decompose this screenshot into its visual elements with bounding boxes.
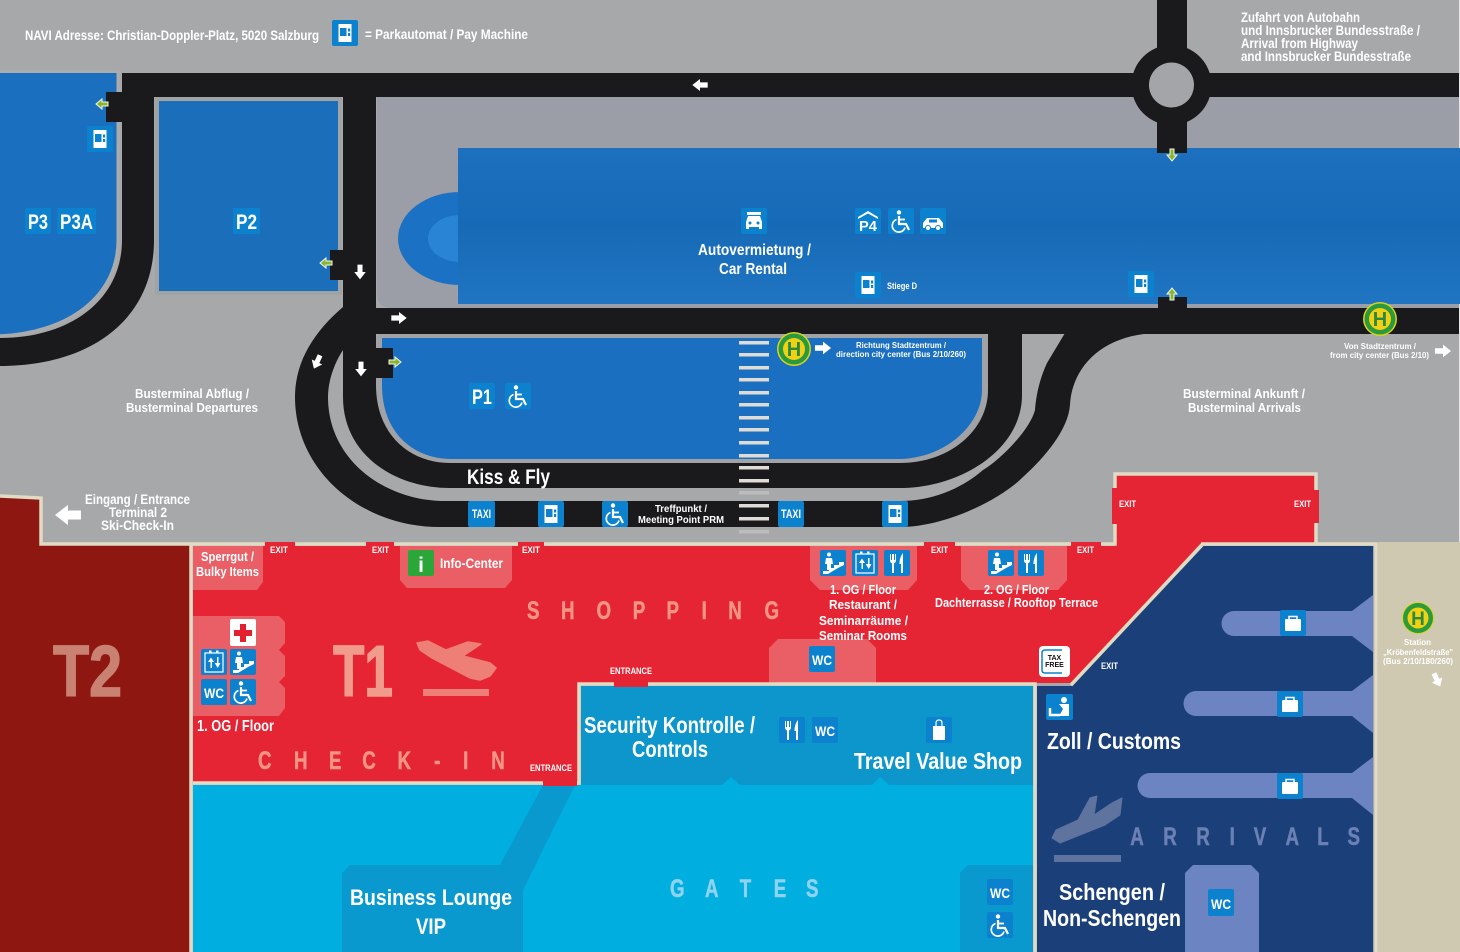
road: stubs	[106, 92, 1187, 378]
bus stop text: direction city center	[836, 340, 966, 359]
bus station label	[1383, 637, 1453, 666]
restaurant and seminar label	[819, 582, 908, 643]
terminal 1 red hall	[193, 474, 1315, 783]
roads	[0, 0, 1459, 527]
meeting point label: Treffpunkt /	[655, 503, 707, 515]
parking P1 lot	[382, 338, 982, 459]
T2 label: T2	[53, 632, 122, 712]
bus stop text: direction city center: direction city center (Bus 2/10/260)	[836, 349, 966, 359]
entrance labels: ENTRANCE	[610, 666, 652, 676]
bulky items label: Bulky Items	[196, 564, 259, 579]
icon: restaurant security	[779, 717, 805, 743]
bus terminal departures label: Busterminal Departures	[126, 400, 258, 415]
exit labels: EXIT	[1101, 661, 1118, 671]
exit labels: EXIT	[372, 545, 389, 555]
badge: WC gates: WC	[990, 885, 1010, 901]
customs label: Zoll / Customs	[1047, 728, 1181, 754]
icon: wheelchair gates	[987, 912, 1013, 938]
highway access text: and Innsbrucker Bundesstraße	[1241, 48, 1411, 64]
bus station label: „Kröbenfeldstraße"	[1383, 648, 1453, 657]
terminal 2 entrance label: Eingang / Entrance	[85, 491, 190, 507]
road: Kiss and Fly inner loop	[343, 97, 1022, 488]
badge: WC security	[812, 717, 838, 743]
icon: baggage belt 2	[1277, 691, 1303, 717]
check-in label: CHECK-IN	[258, 746, 505, 775]
icon: car rental	[741, 208, 767, 234]
bus stop text: direction city center: Richtung Stadtzentrum /	[856, 340, 947, 350]
belt 1	[1222, 595, 1373, 652]
exit labels: EXIT	[1119, 499, 1136, 509]
icon: pay machine road east	[882, 501, 908, 527]
room: toilets	[769, 639, 876, 683]
icon: tax free: TAX	[1048, 655, 1062, 662]
bus stop text: from city center: from city center (Bus 2/10)	[1330, 350, 1429, 360]
badge: WC arrivals	[1208, 889, 1234, 916]
icon: pay machine legend	[332, 20, 358, 46]
icon: pay machine road west	[538, 501, 564, 527]
badge: taxi west: TAXI	[472, 509, 491, 521]
icon: wheelchair meeting point	[602, 501, 628, 527]
exit labels: EXIT	[1077, 545, 1094, 555]
exit labels: EXIT	[1294, 499, 1311, 509]
room: restaurant stairs	[810, 546, 917, 590]
icon: P4 badge	[855, 208, 881, 235]
meeting point label	[638, 503, 724, 526]
schengen label: Non-Schengen	[1043, 905, 1181, 931]
parking P4 semi-circular ramp	[398, 192, 522, 285]
icon: tax free: FREE	[1045, 662, 1064, 669]
rooftop terrace label: Dachterrasse / Rooftop Terrace	[935, 595, 1098, 610]
header address text: = Parkautomat / Pay Machine	[365, 26, 528, 42]
business lounge label	[350, 885, 512, 939]
badge: taxi east: TAXI	[781, 509, 801, 521]
rooftop terrace label: 2. OG / Floor	[984, 582, 1049, 597]
bus stop: city center direction	[777, 332, 811, 366]
icon: pay machine P3	[87, 126, 113, 152]
bus stop: from city center: H	[1373, 309, 1387, 331]
bus stop: from city center	[1363, 302, 1397, 336]
badge: WC west: WC	[204, 685, 224, 701]
beige right strip	[1378, 542, 1460, 952]
highway access text: und Innsbrucker Bundesstraße /	[1241, 22, 1420, 38]
arrivals label: ARRIVALS	[1130, 822, 1360, 851]
right edge line	[1459, 0, 1460, 542]
icon: pay machine P4 east	[1128, 271, 1154, 297]
bus stop: city center direction: H	[787, 339, 801, 361]
icon: baggage belt 3	[1277, 773, 1303, 799]
entrance labels	[530, 666, 652, 773]
zone: business lounge	[342, 785, 575, 952]
badge: WC gates	[987, 879, 1013, 905]
entrance labels: ENTRANCE	[530, 763, 572, 773]
room: first floor services	[193, 616, 285, 716]
icon: customs	[1046, 694, 1073, 720]
shopping label: SHOPPING	[527, 596, 779, 625]
icon: restaurant first floor	[884, 550, 910, 576]
schengen label	[1043, 879, 1181, 931]
icon: arriving plane	[1052, 796, 1122, 862]
parking P2 lot	[157, 99, 340, 293]
security label: Security Kontrolle /	[584, 712, 755, 738]
badge: taxi west	[468, 501, 495, 527]
icon: car P4	[920, 208, 946, 234]
car rental label: Car Rental	[719, 261, 787, 278]
parking P3 / P3A lot	[0, 72, 118, 336]
car rental label: Autovermietung /	[698, 242, 811, 259]
badge: P3: P3	[28, 211, 48, 234]
badge: WC security: WC	[815, 723, 835, 739]
icon: lift west	[201, 649, 227, 675]
bus terminal departures label: Busterminal Abflug /	[135, 386, 249, 401]
road: highway access	[1157, 0, 1187, 153]
terminal 2 block	[0, 497, 190, 952]
arrivals toilet room	[1185, 865, 1259, 952]
icon: first aid	[230, 619, 256, 646]
bus terminal departures label	[126, 386, 258, 415]
bus stop text: from city center: Von Stadtzentrum /	[1344, 341, 1417, 351]
Stiege D label: Stiege D	[887, 281, 917, 291]
gates label: GATES	[670, 874, 819, 903]
bus stop text: from city center	[1330, 341, 1429, 360]
highway access text	[1241, 9, 1420, 64]
arrivals hall	[1037, 546, 1373, 952]
icon: shopping bag	[926, 717, 952, 743]
terminal 2 entrance label: Ski-Check-In	[101, 517, 174, 533]
parking P4 lot	[458, 148, 1460, 304]
security hall	[581, 686, 1033, 785]
bus station label: Station	[1404, 637, 1431, 647]
road: horizontal lower road	[343, 308, 1459, 334]
business lounge label: Business Lounge	[350, 885, 512, 910]
icon: departing plane	[417, 641, 496, 696]
restaurant and seminar label: 1. OG / Floor	[830, 582, 896, 597]
bus terminal arrivals label: Busterminal Arrivals	[1188, 400, 1301, 415]
exit labels	[270, 499, 1311, 671]
belt 3	[1138, 757, 1373, 815]
info center label: Info-Center	[440, 556, 504, 571]
badge: WC arrivals: WC	[1211, 896, 1231, 912]
bus station label: (Bus 2/10/180/260)	[1383, 657, 1453, 666]
travel value shop label: Travel Value Shop	[854, 748, 1022, 774]
Kiss and Fly label: Kiss & Fly	[467, 466, 550, 489]
bulky items label	[196, 549, 259, 579]
roundabout	[1132, 45, 1212, 125]
icon: stairs second floor	[988, 550, 1014, 576]
bus stop: Kröbenfeldstraße	[1402, 602, 1434, 634]
exit labels: EXIT	[270, 545, 288, 555]
gates darker zones	[342, 777, 1033, 952]
restaurant and seminar label: Restaurant /	[829, 597, 897, 612]
bulky items label: Sperrgut /	[201, 549, 254, 564]
header address text	[25, 20, 528, 46]
restaurant and seminar label: Seminar Rooms	[819, 628, 907, 643]
icon: info badge: i	[418, 554, 424, 577]
business lounge label: VIP	[416, 914, 446, 939]
zone: gates services	[960, 865, 1033, 952]
badge: WC west	[201, 679, 227, 705]
badge: P2: P2	[236, 211, 257, 234]
schengen label: Schengen /	[1059, 879, 1166, 905]
road: left curve	[0, 73, 154, 366]
icon: lift first floor	[852, 550, 878, 576]
baggage belts	[1138, 595, 1373, 952]
belt 2	[1184, 675, 1373, 733]
icon: wheelchair west	[230, 679, 256, 705]
road: top main road	[122, 73, 1459, 97]
building walls	[0, 474, 1376, 952]
icon: info badge	[408, 550, 434, 577]
exit labels: EXIT	[522, 545, 540, 555]
bus terminal arrivals label: Busterminal Ankunft /	[1183, 386, 1305, 401]
badge: P1: P1	[472, 386, 492, 409]
T1 label: T1	[333, 632, 393, 712]
car rental label	[698, 242, 811, 278]
bus stop: Kröbenfeldstraße: H	[1411, 609, 1425, 630]
badge: P3A: P3A	[60, 211, 93, 234]
first floor label: 1. OG / Floor	[197, 718, 274, 735]
meeting point label: Meeting Point PRM	[638, 514, 724, 526]
direction arrows	[55, 79, 1451, 689]
badge: WC shopping: WC	[812, 652, 832, 668]
inner apron band	[377, 97, 1459, 308]
security label	[584, 712, 755, 762]
security label: Controls	[632, 736, 708, 762]
icon: wheelchair P1	[505, 383, 531, 409]
bus terminal arrivals label	[1183, 386, 1305, 415]
terminal 2 entrance label	[85, 491, 190, 533]
rooftop terrace label	[935, 582, 1098, 610]
exit labels: EXIT	[931, 545, 948, 555]
room: info center	[400, 546, 512, 588]
highway access text: Zufahrt von Autobahn	[1241, 9, 1360, 25]
icon: baggage belt 1	[1280, 610, 1306, 636]
badge: taxi east	[778, 501, 804, 527]
icon: stairs first floor	[820, 550, 846, 576]
light rooms on red hall	[193, 546, 1067, 716]
restaurant and seminar label: Seminarräume /	[819, 613, 908, 628]
zone: gate ticks	[722, 777, 889, 785]
room: bulky items	[193, 546, 263, 590]
terminal 2 entrance label: Terminal 2	[109, 504, 167, 520]
parking P1 border	[376, 333, 988, 463]
pedestrian crossing	[739, 341, 769, 534]
road: outer loop	[295, 307, 1160, 527]
red exit and entrance gaps	[265, 488, 1319, 786]
icon: P4 badge: P4	[859, 218, 878, 235]
icon: pay machine Stiege D	[855, 272, 881, 298]
icon: wheelchair P4	[888, 208, 914, 234]
header address text: NAVI Adresse: Christian-Doppler-Platz, 5020 Salzburg	[25, 27, 319, 43]
icon: stairs west	[230, 649, 256, 675]
highway access text: Arrival from Highway	[1241, 35, 1358, 51]
icon: restaurant second floor	[1018, 550, 1044, 576]
badge: WC shopping	[809, 646, 835, 672]
gates hall	[193, 785, 1033, 952]
icon: tax free	[1039, 646, 1070, 677]
room: rooftop stairs	[961, 546, 1067, 590]
